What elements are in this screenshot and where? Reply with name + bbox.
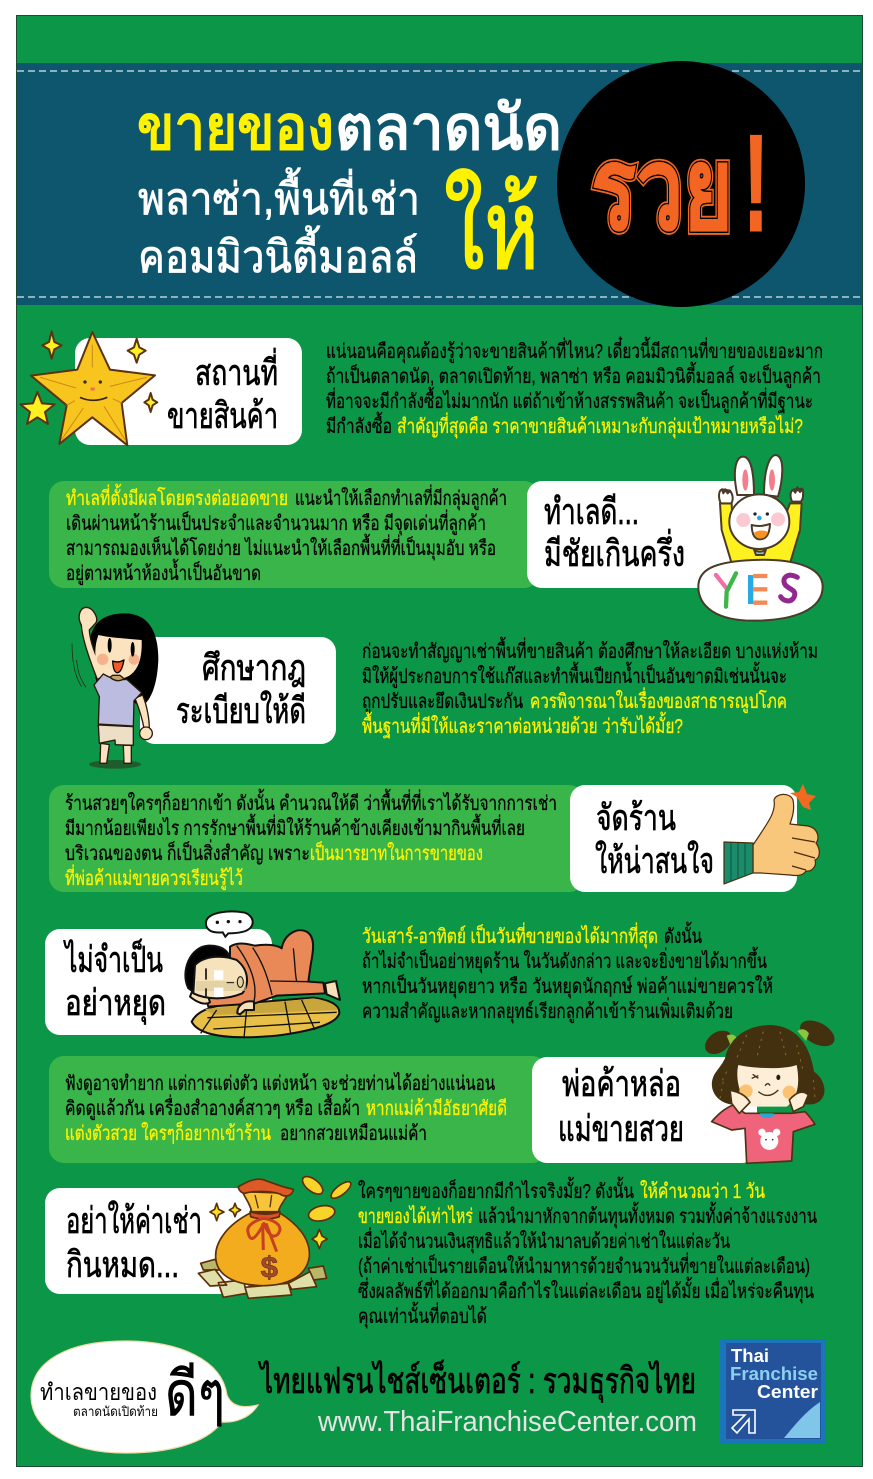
body text: ความสำคัญและหากลยุทธ์เรียกลูกค้าเข้าร้านเพิ่มเติมด้วย <box>362 997 733 1024</box>
body text: ควรพิจารณาในเรื่องของสาธารณูปโภค <box>530 687 787 714</box>
body text: ให้คำนวณว่า 1 วัน <box>640 1180 765 1203</box>
text panel: เดินผ่านหน้าร้านเป็นประจำและจำนวนมาก หรือ มีจุดเด่นที่ลูกค้า <box>66 509 486 536</box>
text panel: บริเวณของตน ก็เป็นสิ่งสำคัญ เพราะ <box>65 839 310 865</box>
heading card: กินหมด... <box>66 1244 179 1285</box>
footer speech bubble: ดีๆ <box>165 1360 225 1429</box>
body text: ใครๆขายของก็อยากมีกำไรจริงมั้ย? ดังนั้น <box>358 1177 634 1203</box>
text panel: ร้านสวยๆใครๆก็อยากเข้า ดังนั้น คำนวณให้ดี ว่าพื้นที่ที่เราได้รับจากการเช่า <box>65 789 557 815</box>
body text: ถูกปรับและยึดเงินประกัน <box>362 691 523 714</box>
logo: Thai Franchise Center: Franchise <box>730 1364 818 1384</box>
heading card <box>45 1188 250 1294</box>
section 3: study the rules <box>72 607 818 769</box>
text panel: คิดดูแล้วกัน เครื่องสำอางค์สาวๆ หรือ เสื้อผ้า <box>65 1094 360 1121</box>
heading card <box>532 1057 757 1163</box>
body text: คุณเท่านั้นที่ตอบได้ <box>358 1302 487 1329</box>
heading card: ระเบียบให้ดี <box>176 690 306 731</box>
heading card: แม่ขายสวย <box>558 1108 684 1149</box>
icon: money bag <box>198 1173 353 1298</box>
black circle <box>557 61 805 307</box>
title word: rich: ! <box>744 107 768 259</box>
section 4: shop layout <box>49 784 819 892</box>
text panel: อยากสวยเหมือนแม่ค้า <box>280 1123 427 1145</box>
section 7: rent <box>45 1173 817 1329</box>
text panel: อยู่ตามหน้าห้องน้ำเป็นอันขาด <box>66 559 261 586</box>
heading card: ศึกษากฎ <box>202 647 306 688</box>
icon: girl raising hand <box>72 607 158 769</box>
text panel: สามารถมองเห็นได้โดยง่าย ไม่แนะนำให้เลือกพื้นที่ที่เป็นมุมอับ หรือ <box>66 534 496 561</box>
heading card <box>75 338 302 445</box>
footer website: www.ThaiFranchiseCenter.com <box>317 1406 697 1438</box>
heading card <box>527 481 752 588</box>
body text <box>326 336 823 439</box>
heading card: พ่อค้าหล่อ <box>562 1063 681 1104</box>
body text: หากเป็นวันหยุดยาว หรือ วันหยุดนักฤกษ์ พ่อค้าแม่ขายควรให้ <box>362 973 773 999</box>
logo: Thai Franchise Center: Center <box>757 1382 818 1402</box>
heading card: สถานที่ <box>195 348 278 393</box>
text panel: แต่งตัวสวย ใครๆก็อยากเข้าร้าน <box>65 1120 271 1145</box>
icon: sleeping person on mat <box>185 930 340 1038</box>
title line 1: ตลาดนัด <box>335 94 562 163</box>
text panel <box>49 785 584 892</box>
icon: speech bubble dots <box>206 911 253 937</box>
body text <box>362 637 818 738</box>
text panel: ฟังดูอาจทำยาก แต่การแต่งตัว แต่งหน้า จะช่วยท่านได้อย่างแน่นอน <box>65 1072 495 1096</box>
title word: rich: รวย <box>591 124 733 254</box>
title line 2: พลาซ่า,พื้นที่เช่า <box>138 167 420 224</box>
heading card: ไม่จำเป็น <box>63 937 163 980</box>
footer title: ไทยแฟรนไชส์เซ็นเตอร์ : รวมธุรกิจไทย <box>258 1358 696 1403</box>
body text: ดังนั้น <box>664 922 702 948</box>
body text: ขายของได้เท่าไหร่ <box>358 1205 473 1228</box>
text panel <box>49 1056 547 1163</box>
text panel: แนะนำให้เลือกทำเลที่มีกลุ่มลูกค้า <box>295 484 507 511</box>
text panel: มีมากน้อยเพียงไร การรักษาพื้นที่มิให้ร้านค้าข้างเคียงเข้ามากินพื้นที่เลย <box>65 814 525 840</box>
heading card: มีชัยเกินครึ่ง <box>544 529 685 574</box>
title line 1 <box>137 94 562 163</box>
body text: มีกำลังซื้อ <box>326 412 392 438</box>
text panel: หากแม่ค้ามีอัธยาศัยดี <box>366 1098 507 1120</box>
icon: star mascot <box>20 331 157 445</box>
heading card <box>570 785 797 892</box>
text panel: ที่พ่อค้าแม่ขายควรเรียนรู้ไว้ <box>65 864 243 891</box>
body text: เมื่อได้จำนวนเงินสุทธิแล้วให้นำมาลบด้วยค่าเช่าในแต่ละวัน <box>358 1227 730 1254</box>
heading card: ทำเลดี... <box>544 491 639 532</box>
title word: rich: รวย <box>591 124 733 254</box>
title word: give: ให้ <box>444 169 539 292</box>
heading card: อย่าหยุด <box>65 982 166 1025</box>
heading card: อย่าให้ค่าเช่า <box>66 1200 202 1241</box>
heading card <box>140 637 336 744</box>
title line 1: ขายของ <box>137 94 334 163</box>
header banner <box>17 61 862 307</box>
heading card <box>45 929 272 1035</box>
title line 3: คอมมิวนิตี้มอลล์ <box>138 225 418 282</box>
section 1: location <box>20 331 823 445</box>
body text <box>358 1177 817 1329</box>
heading card: ให้น่าสนใจ <box>595 840 714 881</box>
body text <box>362 922 773 1024</box>
body text: วันเสาร์-อาทิตย์ เป็นวันที่ขายของได้มากที่สุด <box>362 922 658 949</box>
heading card: ขายสินค้า <box>167 395 278 436</box>
footer speech bubble <box>31 1341 258 1453</box>
icon: girl with pigtails <box>701 1015 839 1163</box>
icon: money bag: $ <box>261 1252 278 1285</box>
icon: arrow <box>732 1410 755 1433</box>
text panel: ทำเลที่ตั้งมีผลโดยตรงต่อยอดขาย <box>66 484 288 510</box>
footer speech bubble: ทำเลขายของ <box>40 1379 157 1405</box>
text panel: เป็นมารยาทในการขายของ <box>310 840 483 865</box>
section 2: good location <box>49 455 823 621</box>
text panel <box>49 481 539 588</box>
heading card: จัดร้าน <box>596 797 676 838</box>
section 5: do not close <box>45 911 773 1038</box>
section 6: look good <box>49 1015 839 1163</box>
body text: พื้นฐานที่มีให้และราคาต่อหน่วยด้วย ว่ารับได้มั้ย? <box>362 712 683 738</box>
icon: rabbit with YES sign <box>698 455 823 621</box>
logo: Thai Franchise Center: Thai <box>731 1346 769 1366</box>
logo: Thai Franchise Center <box>720 1339 826 1444</box>
footer speech bubble: ตลาดนัดเปิดท้าย <box>73 1404 158 1419</box>
title word: rich: รวย <box>591 124 733 254</box>
icon: thumbs up <box>724 784 819 884</box>
